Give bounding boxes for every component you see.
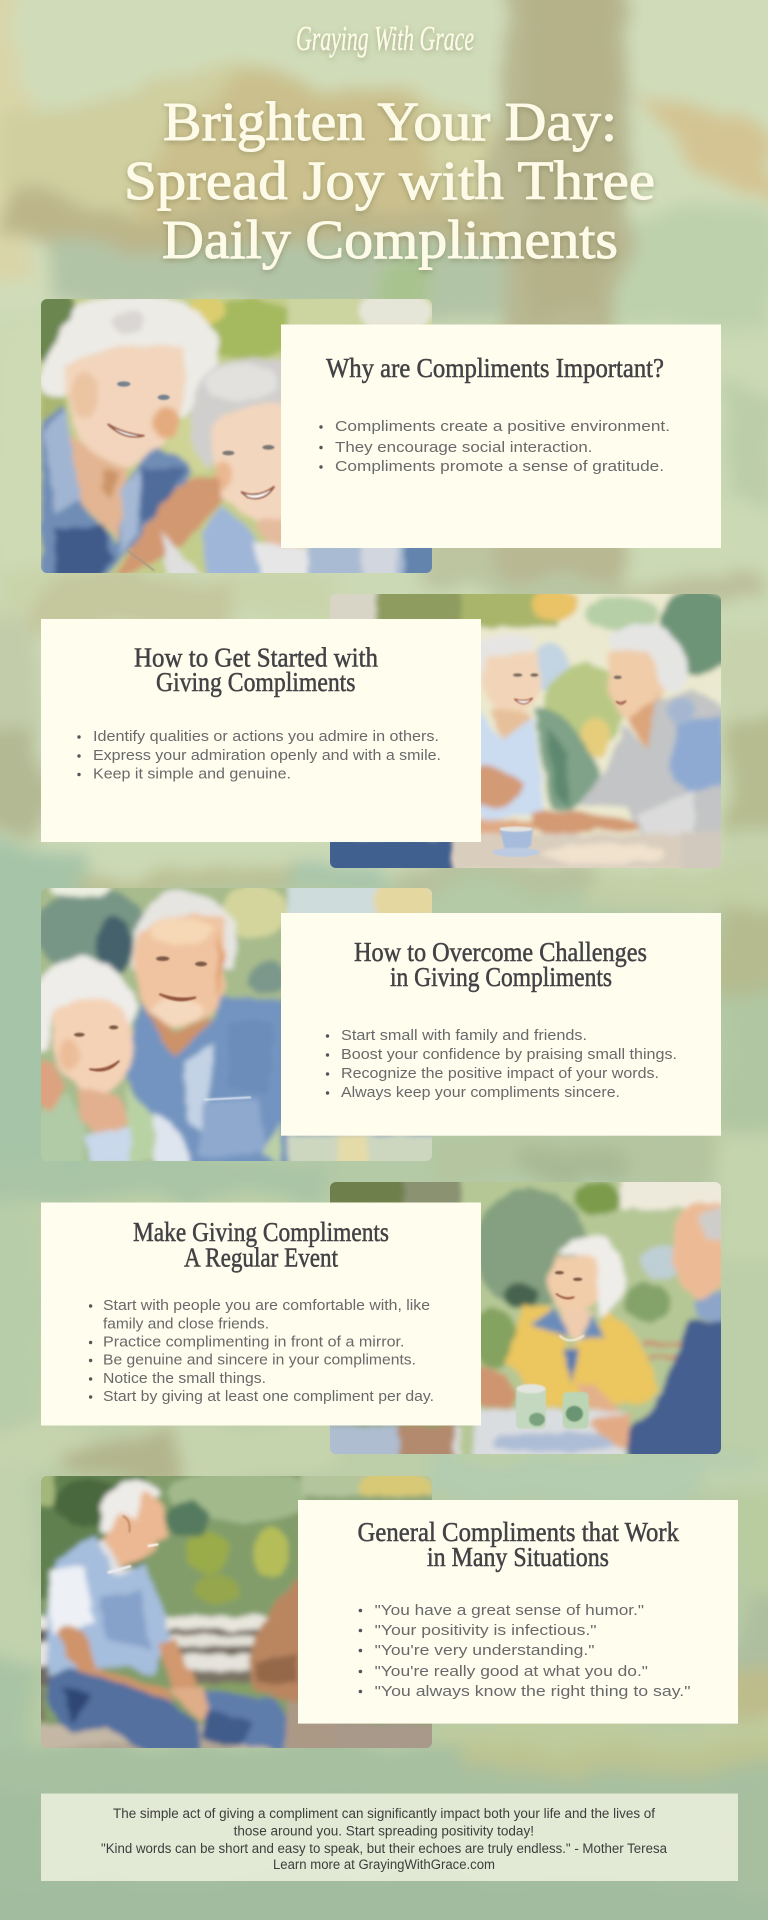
heading: General Compliments that Work [358,1517,679,1547]
illustration: smiling older couple [41,888,432,1161]
footer callout: The simple act of giving a compliment can significantly impact both your life and the lives of [113,1806,655,1821]
footer callout: "Kind words can be short and easy to speak, but their echoes are truly endless." - Mother Teresa [101,1841,667,1856]
illustration: two smiling women [41,299,432,573]
brand name: Graying With Grace [296,19,474,58]
panel: make it a regular event [41,1182,721,1454]
bullet list: "You have a great sense of humor." [375,1602,644,1619]
bullet list: "You're really good at what you do." [375,1663,648,1680]
title: Daily Compliments [162,209,618,270]
bullet list: Be genuine and sincere in your compliments. [103,1353,416,1369]
bullet list: "You're very understanding." [375,1642,594,1659]
bullet list [359,1602,690,1700]
heading: Why are Compliments Important? [326,353,664,383]
bullet list: Compliments create a positive environment. [335,419,670,435]
bullet list: Start with people you are comfortable with, like [103,1298,430,1314]
title [124,91,655,270]
illustration: man sitting on a park bench [41,1476,432,1748]
heading [134,642,378,697]
panel: general compliments [41,1476,738,1748]
bullet list: "You always know the right thing to say." [375,1683,690,1700]
bullet list: "Your positivity is infectious." [375,1622,596,1639]
illustration: two women at a cafe table [330,594,721,868]
bullet list: Identify qualities or actions you admire in others. [93,729,439,745]
text card [298,1500,738,1724]
bullet list: family and close friends. [103,1316,269,1332]
bullet list: Recognize the positive impact of your words. [341,1066,659,1082]
bullet list: They encourage social interaction. [335,440,592,456]
text card [41,619,481,842]
footer callout: Learn more at GrayingWithGrace.com [273,1857,495,1872]
text card [41,1202,481,1426]
title: Brighten Your Day: [163,91,617,152]
bullet list: Practice complimenting in front of a mirror. [103,1335,404,1351]
heading: Make Giving Compliments [133,1217,389,1247]
bullet list: Start small with family and friends. [341,1028,587,1044]
bullet list [326,1028,677,1101]
panel: overcoming challenges [41,888,721,1161]
heading: Giving Compliments [156,667,356,697]
heading [133,1217,389,1273]
heading: How to Get Started with [134,642,378,672]
heading: A Regular Event [184,1243,338,1273]
heading: in Many Situations [427,1542,609,1572]
footer callout [41,1794,738,1881]
text card [281,324,721,548]
panel: why compliments are important [41,299,721,573]
heading: in Giving Compliments [390,962,612,992]
bullet list: Keep it simple and genuine. [93,767,291,783]
bullet list: Compliments promote a sense of gratitude. [335,459,664,475]
bullet list: Boost your confidence by praising small things. [341,1047,677,1063]
bullet list: Express your admiration openly and with a smile. [93,748,441,764]
bullet list: Always keep your compliments sincere. [341,1085,620,1101]
bullet list: Notice the small things. [103,1371,266,1387]
panel: how to get started [41,594,721,868]
heading [354,937,647,992]
bullet list [319,419,670,475]
bullet list [77,729,441,783]
illustration: woman in yellow cardigan at table [330,1182,721,1454]
bullet list [89,1298,434,1405]
heading: How to Overcome Challenges [354,937,647,967]
bullet list: Start by giving at least one compliment per day. [103,1389,434,1405]
heading [358,1517,679,1572]
footer callout: those around you. Start spreading positivity today! [234,1824,534,1839]
title: Spread Joy with Three [124,150,655,211]
text card [281,913,721,1136]
